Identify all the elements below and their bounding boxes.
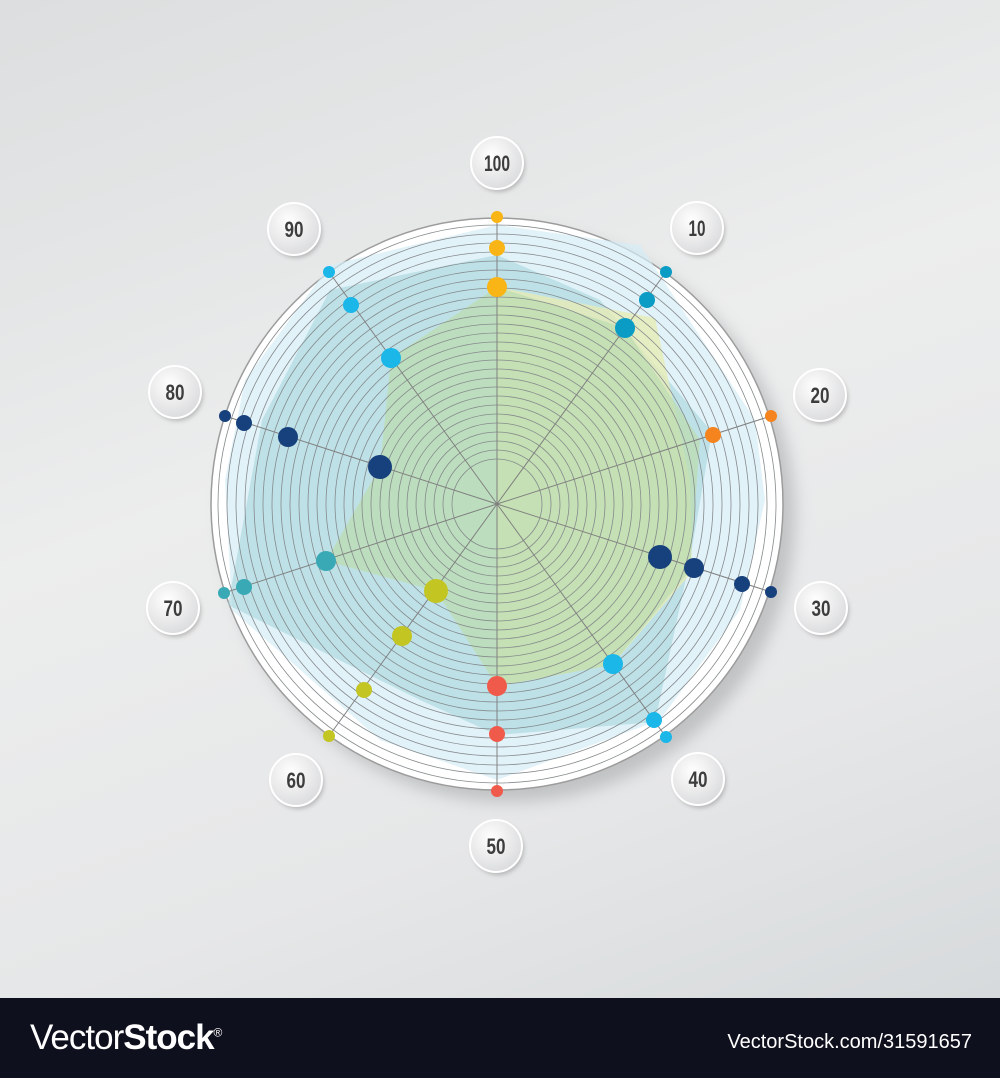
axis labels: 20 — [810, 383, 830, 408]
polygon: yellow — [497, 287, 692, 686]
footer bar — [0, 998, 1000, 1078]
axis labels: 100 — [484, 151, 510, 176]
axis labels: 40 — [688, 767, 708, 792]
axis labels: 90 — [284, 217, 304, 242]
axis labels: 10 — [688, 216, 706, 241]
footer id: VectorStock.com/31591657 — [727, 1031, 972, 1053]
data dots — [218, 211, 777, 797]
polygon: light blue — [225, 225, 765, 780]
axis labels — [147, 137, 849, 875]
axis labels: 30 — [812, 596, 830, 621]
axis labels: 70 — [164, 596, 182, 621]
axis labels: 50 — [486, 834, 506, 859]
axis labels: 60 — [286, 768, 306, 793]
axis labels: 80 — [166, 380, 184, 405]
chart disc — [211, 217, 795, 802]
polygon: green — [326, 287, 700, 686]
polygon: teal — [228, 255, 712, 735]
footer logo: VectorStock® — [30, 1018, 221, 1057]
